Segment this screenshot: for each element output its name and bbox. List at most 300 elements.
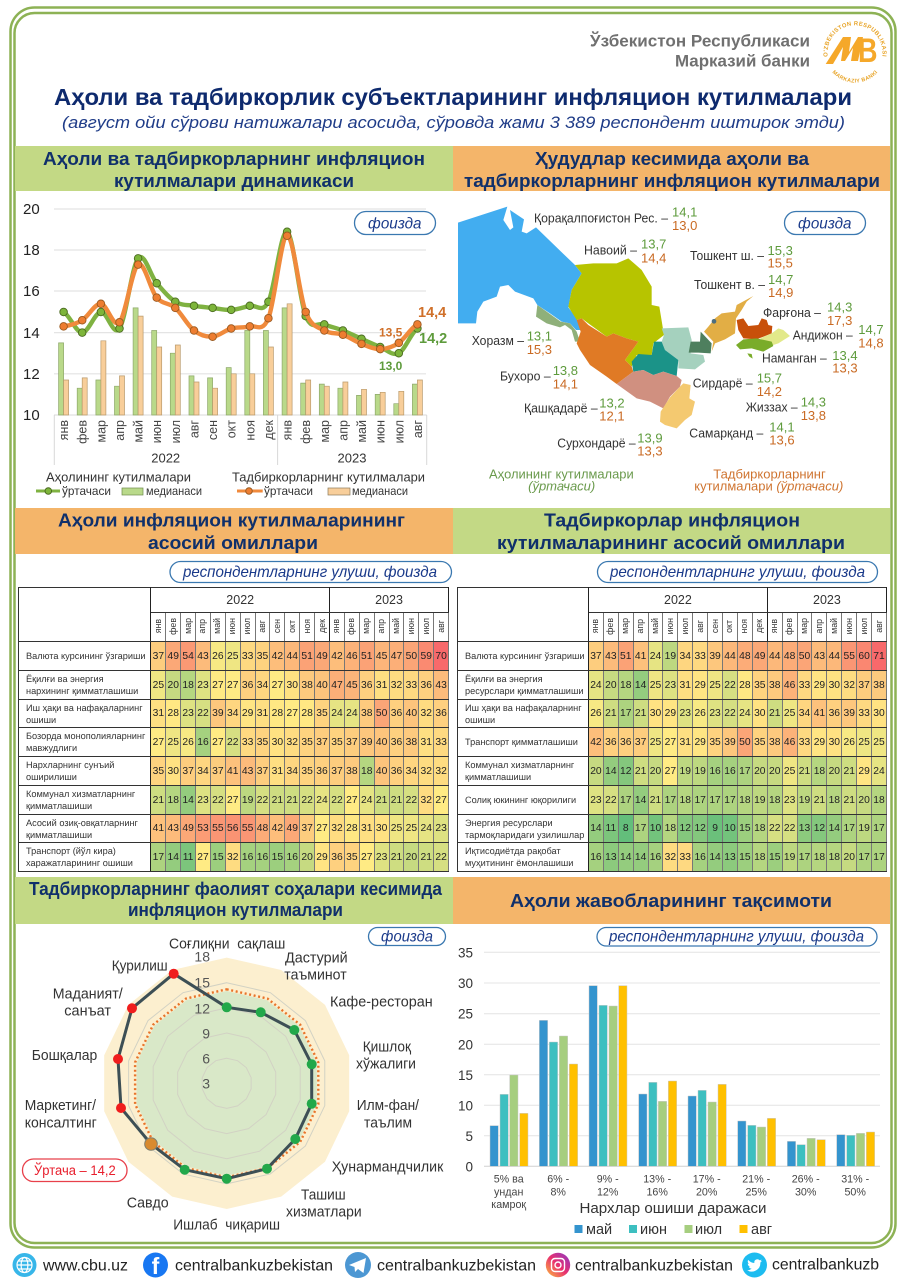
heading: dynamics: Аҳоли ва тадбиркорларнинг инфляцион bbox=[43, 148, 425, 169]
y axis labels bbox=[23, 201, 40, 424]
heatmap table: population factors: 32 bbox=[420, 708, 432, 719]
heatmap table: business factors: 28 bbox=[739, 680, 751, 690]
heatmap table: business factors: 35 bbox=[754, 680, 766, 690]
heatmap table: population factors: 40 bbox=[316, 680, 328, 690]
heatmap table: business factors: 23 bbox=[784, 794, 795, 806]
heatmap table: business factors: Энергия ресурслари bbox=[465, 818, 553, 828]
heatmap table: business factors: июл bbox=[680, 618, 690, 634]
heatmap table: population factors: 20 bbox=[167, 680, 179, 690]
heatmap table: population factors: 35 bbox=[257, 736, 268, 748]
pill: percent (chart): фоизда bbox=[368, 215, 422, 232]
radar chart: sectors bbox=[25, 936, 444, 1233]
heatmap table: population factors: 21 bbox=[420, 852, 432, 862]
heatmap table: population factors: 33 bbox=[242, 736, 253, 748]
heatmap table: population factors: 30 bbox=[167, 766, 179, 776]
map labels: Андижон – bbox=[793, 328, 853, 342]
radar axis labels: консалтинг bbox=[25, 1115, 97, 1131]
heatmap table: population factors: 37 bbox=[331, 766, 343, 776]
map labels: 13,9 bbox=[637, 430, 663, 445]
heatmap table: population factors: сен bbox=[272, 619, 282, 633]
map of Uzbekistan regions bbox=[458, 207, 790, 428]
heatmap table: population factors: 22 bbox=[435, 852, 447, 862]
heatmap table: business factors: янв bbox=[769, 619, 779, 633]
heatmap table: business factors: 26 bbox=[590, 708, 602, 719]
heatmap table: population factors: 38 bbox=[361, 708, 372, 719]
year axis labels: 2023 bbox=[338, 450, 366, 466]
map labels: 13,3 bbox=[832, 361, 858, 376]
heatmap table: business factors: 38 bbox=[769, 736, 780, 748]
heatmap table: business factors: 17 bbox=[843, 823, 855, 834]
bars: May bbox=[490, 986, 845, 1166]
heatmap table: population factors: 39 bbox=[212, 708, 224, 719]
heatmap table: business factors: 35 bbox=[709, 736, 721, 748]
heatmap table: business factors: 25 bbox=[784, 708, 795, 719]
map labels: Сурхондарё – bbox=[557, 436, 636, 450]
region: Tashkent bbox=[704, 296, 753, 352]
heatmap table: business factors: 18 bbox=[739, 794, 751, 806]
heatmap table: business factors: 27 bbox=[665, 766, 676, 776]
heatmap table: business factors: 19 bbox=[694, 766, 706, 776]
y axis labels: 10 bbox=[458, 1098, 473, 1114]
heatmap table: business factors: май bbox=[829, 618, 839, 634]
heatmap table: population factors: 27 bbox=[286, 708, 298, 719]
heatmap table: population factors: 42 bbox=[331, 650, 343, 662]
heatmap table: business factors: 37 bbox=[858, 680, 870, 690]
heatmap table: population factors: 38 bbox=[346, 766, 358, 776]
heatmap table: business factors: 20 bbox=[650, 766, 661, 776]
heatmap table: business factors: 33 bbox=[694, 650, 706, 662]
region: Fergana enclave bbox=[747, 353, 753, 359]
heatmap table: population factors: 30 bbox=[286, 680, 298, 690]
heatmap table: population factors: 21 bbox=[391, 852, 402, 862]
category labels: камроқ bbox=[491, 1199, 526, 1211]
heatmap table: business factors: 31 bbox=[680, 736, 691, 748]
heatmap table: population factors: мар bbox=[183, 618, 193, 634]
month axis labels: июл bbox=[392, 420, 406, 443]
map legend: business bbox=[694, 466, 843, 494]
heatmap table: business factors: 16 bbox=[650, 852, 661, 862]
heatmap table: business factors: 18 bbox=[769, 794, 780, 806]
heatmap table: population factors: 37 bbox=[153, 650, 164, 662]
heatmap table: business factors: 18 bbox=[873, 794, 885, 806]
heatmap table: business factors: 29 bbox=[694, 680, 706, 690]
heatmap table: population factors: 37 bbox=[316, 736, 328, 748]
heatmap table: business factors: 10 bbox=[724, 823, 736, 834]
heading: regions: Ҳудудлар кесимида аҳоли ва bbox=[535, 148, 810, 169]
map labels: 13,4 bbox=[832, 348, 858, 363]
y axis labels: 15 bbox=[458, 1068, 473, 1083]
icon: facebook bbox=[143, 1252, 168, 1279]
heatmap table: population factors: 28 bbox=[167, 708, 179, 719]
heatmap table: business factors: 25 bbox=[858, 736, 870, 748]
heatmap table: business factors: мар bbox=[620, 618, 630, 634]
heatmap table: population factors: 18 bbox=[182, 680, 194, 690]
heatmap table: business factors: 29 bbox=[858, 766, 870, 776]
heatmap table: business factors: 18 bbox=[814, 852, 825, 862]
heatmap table: population factors: 24 bbox=[331, 708, 343, 719]
pill: percent (map) bbox=[784, 212, 866, 234]
heatmap table: business factors: Иқтисодиётда рақобат bbox=[465, 846, 561, 856]
heatmap table: business factors: 37 bbox=[635, 736, 646, 748]
heatmap table: population factors: 18 bbox=[167, 794, 179, 806]
heatmap table: population factors: 35 bbox=[346, 852, 358, 862]
heatmap table: business factors: 2023 bbox=[813, 593, 841, 607]
month axis labels: фев bbox=[299, 420, 313, 444]
bar chart: distribution of answers bbox=[458, 946, 880, 1238]
heatmap table: business factors: 31 bbox=[680, 680, 691, 690]
heading: regions bbox=[453, 146, 890, 191]
heatmap table: business factors: 22 bbox=[784, 823, 795, 834]
heatmap table: business factors: 17 bbox=[620, 794, 631, 806]
legend bbox=[36, 470, 425, 498]
icon: website bbox=[12, 1253, 36, 1277]
heatmap table: population factors: Асосий озиқ-овқатларнинг bbox=[26, 818, 138, 828]
radar axis labels: хизматлари bbox=[286, 1205, 362, 1221]
legend bbox=[574, 1222, 772, 1238]
heatmap table: business factors: 33 bbox=[680, 852, 691, 862]
legend: медианаси bbox=[352, 484, 408, 498]
heatmap table: business factors: 42 bbox=[590, 736, 602, 748]
heatmap table: business factors: 50 bbox=[739, 736, 751, 748]
heatmap table: business factors: 20 bbox=[769, 766, 780, 776]
heatmap table: population factors: 16 bbox=[197, 736, 209, 748]
heatmap table: business factors: 24 bbox=[873, 766, 885, 776]
heatmap table: population factors: 55 bbox=[242, 823, 253, 834]
heatmap table: business factors: муҳитининг ёмонлашиши bbox=[465, 858, 573, 868]
heatmap table: business factors: 49 bbox=[754, 650, 766, 662]
radar axis labels: таъминот bbox=[284, 967, 347, 983]
heading: business factors: кутилмаларининг асосий омиллари bbox=[497, 532, 845, 553]
heatmap table: business factors: 35 bbox=[754, 736, 766, 748]
y axis labels: 16 bbox=[23, 283, 40, 300]
heatmap table: business factors: 18 bbox=[829, 794, 840, 806]
radar axis labels: Маркетинг/ bbox=[25, 1098, 97, 1114]
heatmap table: business factors: 17 bbox=[739, 766, 751, 776]
heatmap table: population factors: 27 bbox=[361, 852, 372, 862]
radar scale labels: 15 bbox=[194, 975, 210, 991]
heatmap table: population factors: 28 bbox=[346, 823, 358, 834]
y axis labels: 5 bbox=[466, 1129, 473, 1144]
heatmap table: business factors: 32 bbox=[843, 680, 855, 690]
heatmap table: population factors: 37 bbox=[301, 823, 313, 834]
heatmap table: population factors: 27 bbox=[346, 794, 358, 806]
heatmap table: business factors: 36 bbox=[605, 736, 617, 748]
heatmap table: business factors: 39 bbox=[709, 650, 721, 662]
heatmap table: population factors: қимматлашиши bbox=[26, 830, 92, 840]
heatmap table: population factors: 22 bbox=[197, 708, 209, 719]
heatmap table: business factors: 15 bbox=[739, 823, 751, 834]
heatmap table: population factors: 21 bbox=[391, 794, 402, 806]
heatmap table: population factors: 46 bbox=[346, 650, 358, 662]
average dotted line bbox=[135, 989, 318, 1177]
heatmap table: business factors: 32 bbox=[665, 852, 676, 862]
heatmap table: population factors: фев bbox=[346, 618, 356, 634]
heatmap table: population factors: Транспорт (йўл кира) bbox=[26, 846, 116, 856]
map labels bbox=[472, 204, 884, 459]
map labels: 17,3 bbox=[827, 313, 852, 328]
heatmap table: business factors: ошиши bbox=[465, 714, 495, 724]
heatmap table: population factors: 32 bbox=[331, 823, 343, 834]
heatmap table: business factors: 13 bbox=[724, 852, 736, 862]
radar axis labels: Қишлоқ bbox=[363, 1040, 412, 1056]
heatmap table: business factors: 38 bbox=[769, 680, 780, 690]
heatmap table: population factors: май bbox=[212, 618, 222, 634]
map labels: Жиззах – bbox=[746, 401, 798, 415]
heatmap table: business factors: 20 bbox=[858, 794, 870, 806]
month axis labels: июн bbox=[374, 420, 388, 443]
callout: average bbox=[22, 1159, 127, 1182]
heatmap table: population factors: июн bbox=[227, 618, 237, 634]
heatmap table: population factors: 26 bbox=[212, 650, 224, 662]
heading: population factors: асосий омиллари bbox=[148, 532, 318, 553]
heatmap table: business factors: 17 bbox=[620, 708, 631, 719]
heatmap table: population factors: ноя bbox=[302, 619, 312, 633]
heatmap table: population factors: 34 bbox=[286, 766, 298, 776]
y axis labels: 20 bbox=[23, 201, 40, 218]
category labels: ундан bbox=[494, 1186, 523, 1198]
heatmap table: business factors: 19 bbox=[858, 823, 870, 834]
heatmap table: business factors: 19 bbox=[680, 766, 691, 776]
heatmap table: business factors: 20 bbox=[829, 766, 840, 776]
heatmap table: population factors: 25 bbox=[391, 823, 402, 834]
heatmap table: business factors: 21 bbox=[799, 766, 810, 776]
map legend: business: кутилмалари (ўртачаси) bbox=[694, 479, 843, 494]
footer: links: centralbankuzbekistan bbox=[377, 1258, 536, 1274]
legend: июн bbox=[640, 1222, 667, 1238]
heatmap table: business factors: 12 bbox=[694, 823, 706, 834]
heatmap table: population factors: 27 bbox=[212, 680, 224, 690]
heatmap table: business factors: ноя bbox=[739, 619, 749, 633]
heatmap table: business factors: 36 bbox=[620, 736, 631, 748]
heatmap table: business factors: 16 bbox=[724, 766, 736, 776]
map labels: 14,7 bbox=[858, 322, 884, 337]
map labels: 13,3 bbox=[637, 444, 663, 459]
heatmap table: population factors: 35 bbox=[316, 708, 328, 719]
heatmap table: population factors: 37 bbox=[212, 766, 224, 776]
heatmap table: business factors: 17 bbox=[873, 823, 885, 834]
legend: медианаси bbox=[146, 484, 202, 498]
map labels: Наманган – bbox=[762, 352, 827, 366]
heatmap table: business factors: 22 bbox=[769, 823, 780, 834]
heatmap table: business factors: 18 bbox=[680, 794, 691, 806]
map labels: 12,1 bbox=[599, 409, 625, 424]
heatmap table: business factors: 30 bbox=[873, 708, 885, 719]
heatmap table: business factors: 30 bbox=[650, 708, 661, 719]
heatmap table: population factors: 36 bbox=[242, 680, 253, 690]
icon: central bank logo: MARKAZIY BANKI bbox=[832, 70, 878, 83]
legend: авг bbox=[751, 1222, 772, 1238]
heatmap table: business factors: 12 bbox=[680, 823, 691, 834]
map labels: 15,3 bbox=[527, 342, 552, 357]
month axis labels: фев bbox=[76, 420, 90, 444]
chart: inflation expectations dynamics bbox=[23, 201, 447, 498]
heatmap table: population factors: 39 bbox=[361, 736, 372, 748]
category labels: 5% ва bbox=[494, 1174, 524, 1186]
map labels: Қашқадарё – bbox=[524, 401, 598, 415]
heading: sectors: Тадбиркорларнинг фаолият соҳалари кесимида bbox=[29, 878, 443, 899]
radar axis labels: Маданият/ bbox=[53, 986, 124, 1002]
icon: twitter bbox=[742, 1252, 767, 1278]
heatmap table: business factors: Иш ҳақи ва нафақаларнинг bbox=[465, 702, 582, 712]
heatmap table: population factors: 27 bbox=[153, 736, 164, 748]
icon: central bank logo: O'ZBEKISTON RESPUBLIKASI bbox=[823, 21, 887, 57]
heatmap table: business factors: 19 bbox=[799, 794, 810, 806]
heatmap table: population factors: 33 bbox=[406, 680, 417, 690]
heatmap table: business factors: 18 bbox=[754, 852, 766, 862]
heading: business factors: Тадбиркорлар инфляцион bbox=[544, 510, 800, 531]
heatmap table: business factors: 30 bbox=[829, 736, 840, 748]
heatmap table: business factors: 20 bbox=[590, 766, 602, 776]
heatmap table: population factors: 31 bbox=[420, 736, 432, 748]
heatmap table: business factors: 48 bbox=[784, 650, 795, 662]
heatmap table: population factors: 27 bbox=[316, 823, 328, 834]
month axis labels: апр bbox=[113, 420, 127, 441]
heatmap table: business factors: 14 bbox=[635, 680, 646, 690]
heatmap table: business factors: 13 bbox=[799, 823, 810, 834]
heatmap table: business factors: 17 bbox=[665, 794, 676, 806]
heatmap table: business factors: 18 bbox=[754, 823, 766, 834]
heatmap table: business factors: 19 bbox=[784, 852, 795, 862]
heatmap table: business factors: 13 bbox=[605, 852, 617, 862]
heading: sectors bbox=[15, 877, 453, 924]
heatmap table: business factors: авг bbox=[695, 620, 705, 632]
heatmap table: business factors: 11 bbox=[605, 823, 616, 834]
heatmap table: business factors: 23 bbox=[665, 680, 676, 690]
heatmap table: business factors: 38 bbox=[873, 680, 885, 690]
heatmap table: business factors: 10 bbox=[650, 823, 661, 834]
radar axis labels: Савдо bbox=[127, 1196, 169, 1212]
map labels: Сирдарё – bbox=[693, 377, 753, 391]
heatmap table: business factors: Транспорт қимматлашиши bbox=[465, 737, 578, 747]
year axis labels: 2022 bbox=[151, 450, 180, 466]
heatmap table: population factors: 35 bbox=[153, 766, 164, 776]
y axis labels bbox=[458, 946, 473, 1174]
icon: facebook: f bbox=[152, 1253, 160, 1279]
heatmap table: business factors: 18 bbox=[829, 852, 840, 862]
y axis labels: 35 bbox=[458, 946, 473, 960]
heatmap table: business factors: 33 bbox=[858, 708, 870, 719]
icon: central bank logo bbox=[823, 21, 887, 83]
heatmap table: business factors: 24 bbox=[650, 650, 661, 662]
pill: percent (radar) bbox=[368, 928, 446, 946]
map labels: 15,5 bbox=[768, 256, 793, 271]
heatmap table: business factors: Солиқ юкининг юқорилиги bbox=[465, 795, 576, 805]
bars: July bbox=[510, 1006, 865, 1166]
heatmap table: business factors: Ёқилғи ва энергия bbox=[465, 674, 543, 684]
header: central bank name: Марказий банки bbox=[675, 52, 810, 70]
heatmap table: business factors: фев bbox=[605, 618, 615, 634]
heatmap table: population factors: 31 bbox=[376, 680, 387, 690]
heatmap table: business factors: 46 bbox=[784, 736, 795, 748]
heatmap table: business factors: 26 bbox=[694, 708, 706, 719]
heatmap table: business factors: 22 bbox=[605, 794, 617, 806]
heatmap table: business factors: дек bbox=[754, 619, 764, 633]
legend: май bbox=[586, 1222, 612, 1238]
heatmap table: business factors: 21 bbox=[843, 766, 855, 776]
heatmap table: business factors: 23 bbox=[590, 794, 602, 806]
heatmap table: population factors: 36 bbox=[391, 708, 402, 719]
heatmap table: population factors: 41 bbox=[153, 823, 164, 834]
data labels: 14,2 bbox=[419, 331, 447, 347]
heatmap table: population factors: 36 bbox=[420, 680, 432, 690]
heatmap table: population factors: 24 bbox=[361, 794, 372, 806]
heatmap table: population factors: 43 bbox=[197, 650, 209, 662]
map labels: 14,2 bbox=[757, 384, 782, 399]
map labels: 14,3 bbox=[827, 300, 852, 315]
heatmap table: business factors: апр bbox=[635, 619, 645, 633]
heatmap table: business factors: 17 bbox=[694, 794, 706, 806]
heatmap table: business factors: 17 bbox=[709, 794, 721, 806]
region: Khorezm bbox=[536, 305, 580, 342]
category labels: 9% - bbox=[597, 1174, 619, 1186]
heatmap table: population factors: фев bbox=[168, 618, 178, 634]
category labels: 8% bbox=[550, 1186, 566, 1198]
heatmap table: population factors: 19 bbox=[242, 794, 253, 806]
heatmap table: population factors: 16 bbox=[242, 852, 253, 862]
heatmap table: business factors: 20 bbox=[605, 680, 617, 690]
heatmap table: business factors: 33 bbox=[799, 736, 810, 748]
heatmap table: population factors: 21 bbox=[376, 794, 387, 806]
heatmap table: business factors: қимматлашиши bbox=[465, 772, 531, 782]
heatmap table: business factors: 14 bbox=[635, 852, 646, 862]
heatmap table: population factors: 16 bbox=[257, 852, 268, 862]
radar scale labels: 18 bbox=[194, 949, 210, 965]
category labels: 21% - bbox=[742, 1174, 771, 1186]
marker: Tashkent city bbox=[712, 319, 716, 324]
heatmap table: business factors: 17 bbox=[635, 823, 646, 834]
map labels: 13,6 bbox=[769, 432, 795, 447]
heatmap table: business factors: 14 bbox=[635, 794, 646, 806]
heatmap table: business factors: 44 bbox=[724, 650, 736, 662]
heatmap table: population factors: 50 bbox=[376, 708, 387, 719]
heatmap table: business factors: 51 bbox=[620, 650, 631, 662]
radar axis labels: таълим bbox=[364, 1115, 412, 1131]
heatmap table: population factors: 2023 bbox=[375, 593, 403, 607]
region: Fergana bbox=[736, 338, 773, 352]
heatmap table: business factors: 21 bbox=[814, 794, 825, 806]
heatmap table: business factors: 20 bbox=[843, 852, 855, 862]
heatmap table: business factors: Коммунал хизматларнинг bbox=[465, 760, 574, 770]
heatmap table: population factors bbox=[18, 587, 449, 872]
category labels: 25% bbox=[745, 1186, 767, 1198]
radar scale labels: 6 bbox=[202, 1050, 210, 1066]
pill: percent (map): фоизда bbox=[798, 215, 852, 232]
line: population average bbox=[64, 232, 417, 354]
heatmap table: population factors: 23 bbox=[182, 708, 194, 719]
heatmap table: business factors: 14 bbox=[620, 852, 631, 862]
pill: respondent share (bar chart): респондентларнинг улуши, фоизда bbox=[608, 929, 864, 946]
heading: distribution bbox=[453, 877, 890, 924]
y axis labels: 14 bbox=[23, 325, 40, 342]
heatmap table: business factors: 14 bbox=[590, 823, 602, 834]
heatmap table: population factors: 40 bbox=[376, 766, 387, 776]
heatmap table: population factors: 27 bbox=[197, 852, 209, 862]
heatmap table: business factors: 43 bbox=[814, 650, 825, 662]
heatmap table: business factors: 71 bbox=[873, 650, 885, 662]
heatmap table: business factors: 23 bbox=[680, 708, 691, 719]
heatmap table: population factors: 37 bbox=[182, 766, 194, 776]
map labels: 15,7 bbox=[757, 371, 782, 386]
icon: central bank logo: B bbox=[858, 32, 878, 70]
heatmap table: population factors: 70 bbox=[435, 650, 447, 662]
heatmap table: population factors: 45 bbox=[346, 680, 358, 690]
category labels: 20% bbox=[696, 1186, 718, 1198]
legend: ўртачаси bbox=[62, 484, 111, 498]
heatmap table: population factors: Нархларнинг сунъий bbox=[26, 760, 114, 770]
heatmap table: business factors: 25 bbox=[784, 766, 795, 776]
heatmap table: population factors: 22 bbox=[331, 794, 343, 806]
map legend: population: Аҳолининг кутилмалари bbox=[489, 466, 634, 481]
